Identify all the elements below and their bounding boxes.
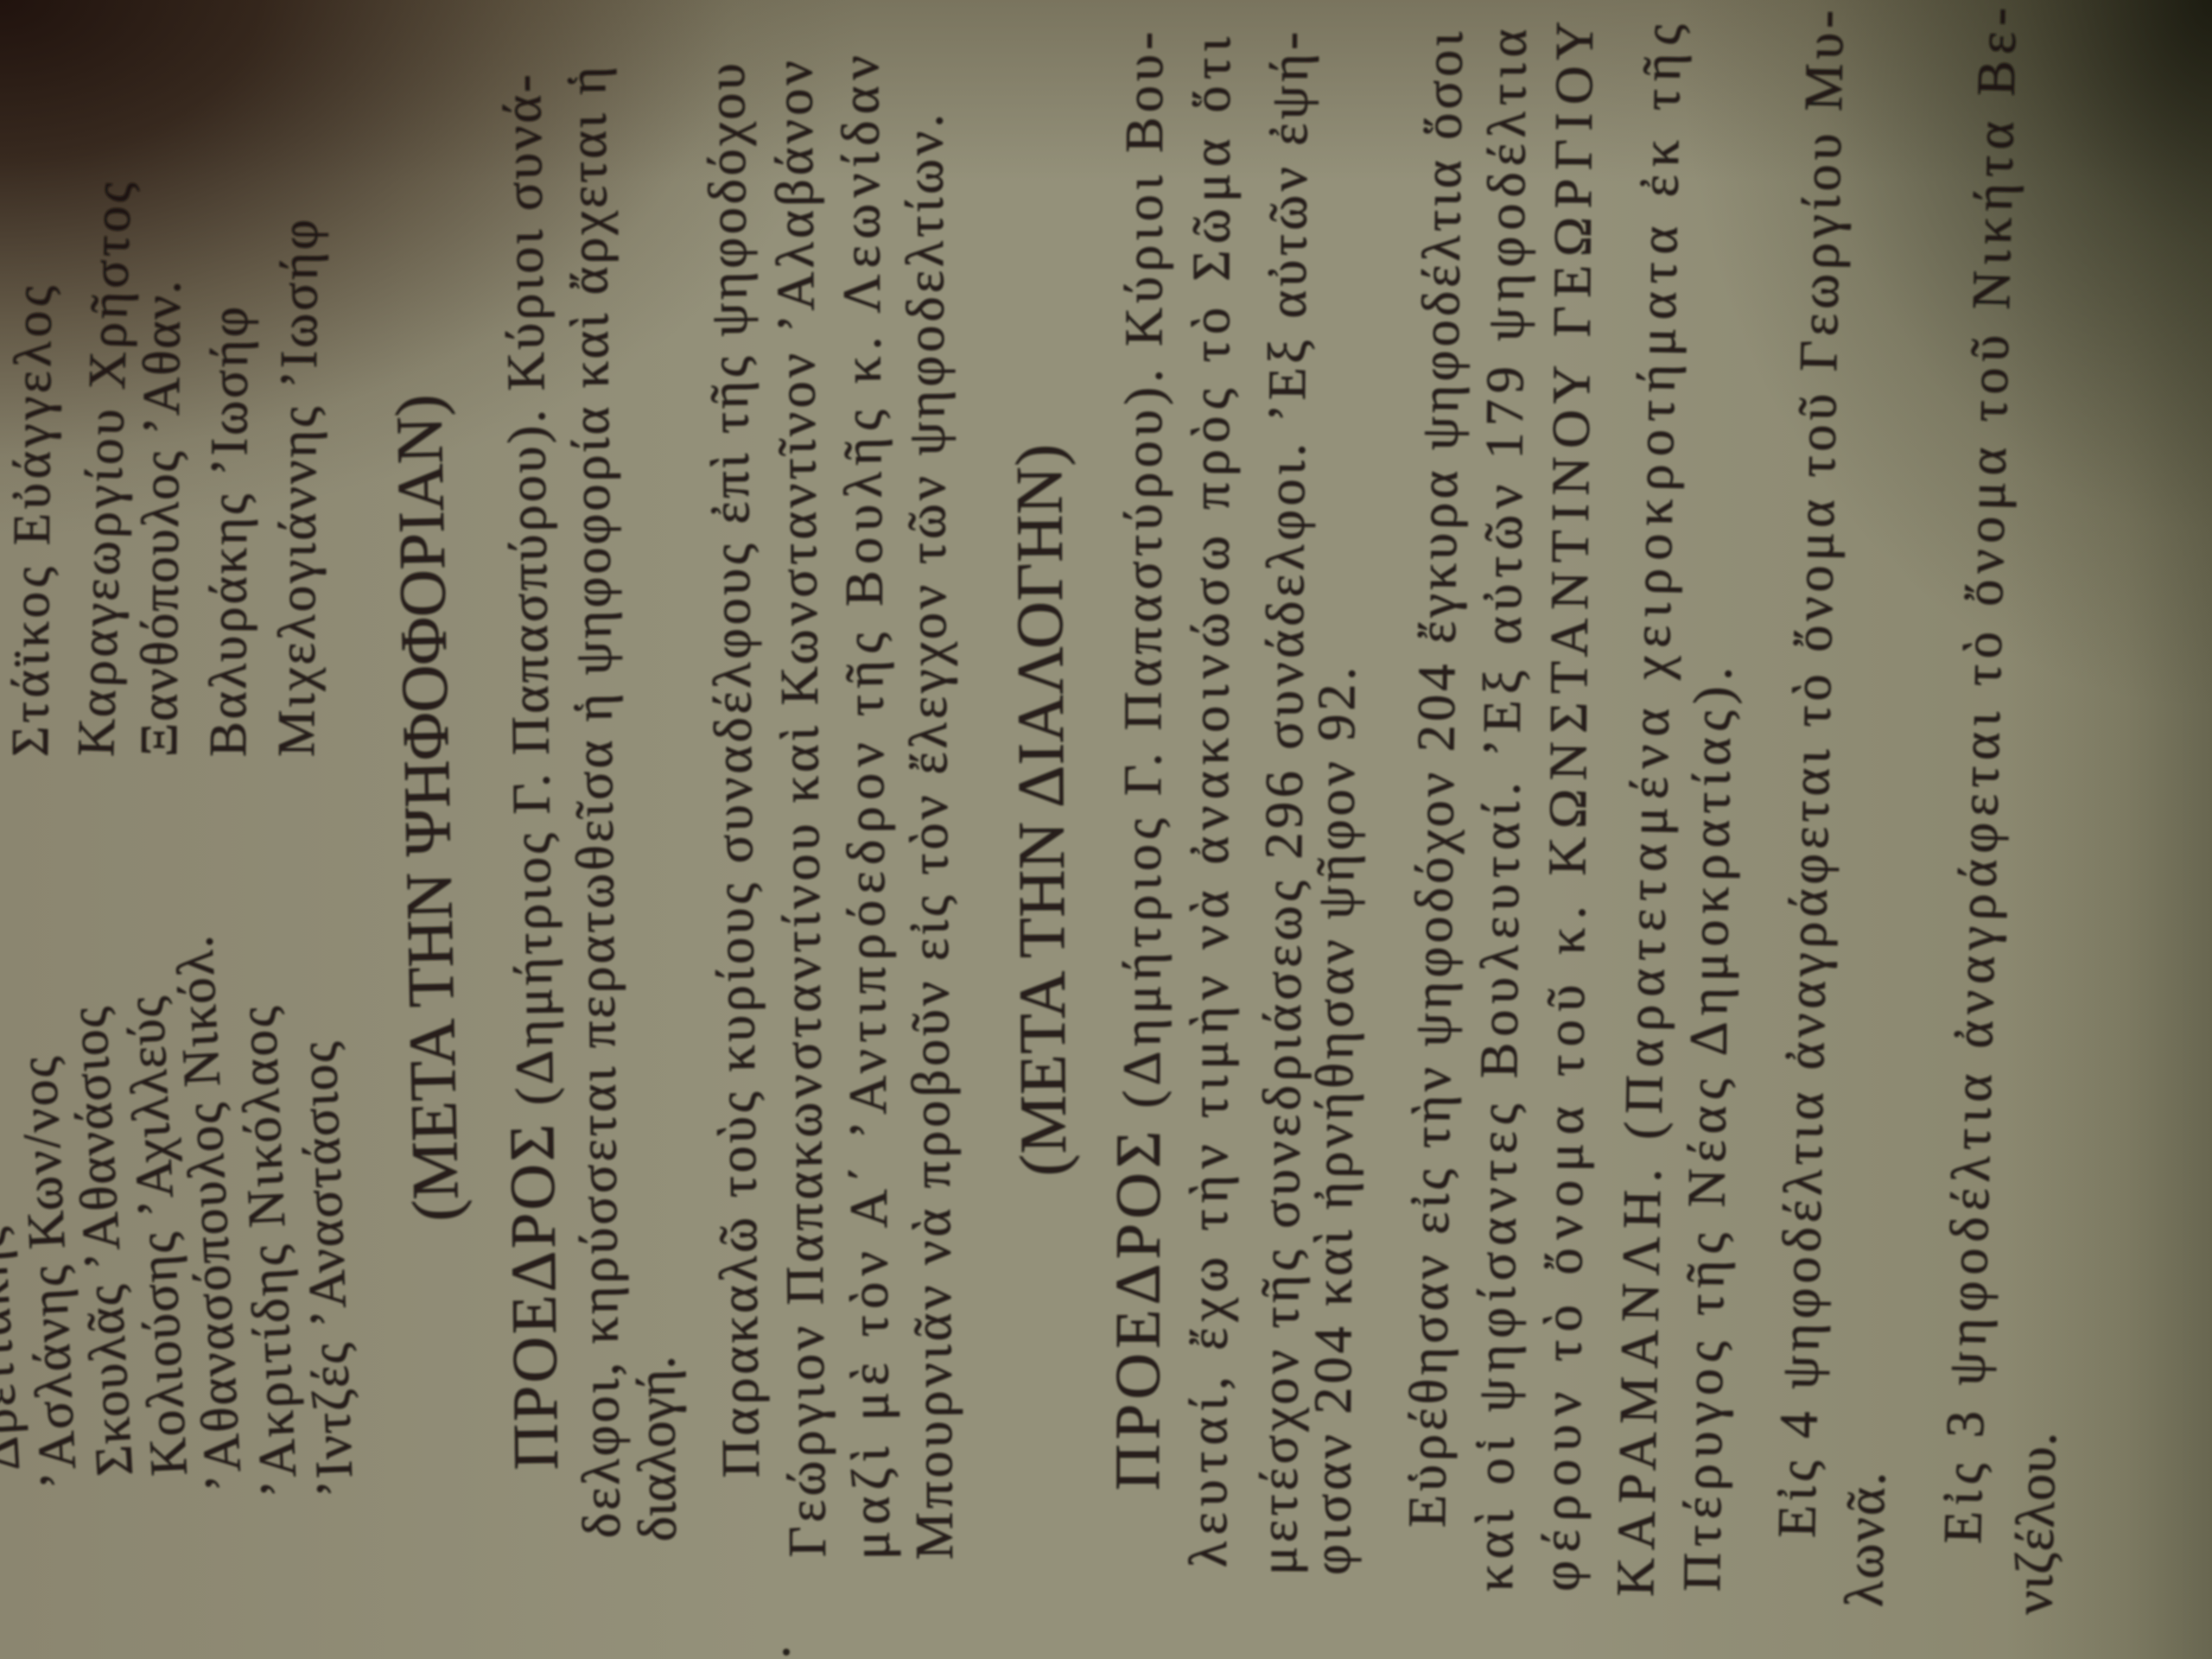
paragraph line: λευταί, ἔχω τὴν τιμὴν νὰ ἀνακοινώσω πρὸς τὸ Σῶμα ὅτι [1179, 37, 1242, 1567]
paragraph line: διαλογή. [627, 1356, 688, 1542]
paragraph line: λωνᾶ. [1835, 1471, 1897, 1607]
heading: after the count: (ΜΕΤΑ ΤΗΝ ΔΙΑΛΟΓΗΝ) [1003, 444, 1080, 1176]
name line: Ξανθόπουλος ’Αθαν. [130, 281, 192, 757]
text block: three ballots [1934, 7, 2068, 1615]
name line: Στάϊκος Εὐάγγελος [2, 286, 63, 757]
paragraph line: Μπουρνιᾶν νὰ προβοῦν εἰς τὸν ἔλεγχον τῶν ψηφοδελτίων. [895, 114, 964, 1560]
name line: ’Αθανασόπουλος Νικόλ. [166, 934, 253, 1493]
paragraph line: Γεώργιον Παπακωνσταντίνου καὶ Κωνσταντῖνον ’Αλαβάνον [765, 60, 837, 1557]
text block: president announces the count [484, 67, 688, 1542]
paragraph line: ΠΡΟΕΔΡΟΣ (Δημήτριος Γ. Παπαστύρου). Κύριοι Βου- [1103, 32, 1177, 1491]
name line: ’Ιντζές ’Αναστάσιος [289, 1041, 365, 1498]
paragraph line: νιζέλου. [2005, 1432, 2068, 1615]
heading: after the vote: (ΜΕΤΑ ΤΗΝ ΨΗΦΟΦΟΡΙΑΝ) [383, 394, 473, 1222]
paragraph line: Εἰς 4 ψηφοδέλτια ἀναγράφεται τὸ ὄνομα τοῦ Γεωργίου Μυ- [1768, 10, 1855, 1538]
name line: Σκουλᾶς ’Αθανάσιος [60, 1006, 144, 1478]
paragraph line: Πτέρυγος τῆς Νέας Δημοκρατίας). [1673, 666, 1743, 1592]
paragraph line: φέρουν τὸ ὄνομα τοῦ κ. ΚΩΝΣΤΑΝΤΙΝΟΥ ΓΕΩΡΓΙΟΥ [1532, 22, 1605, 1592]
name line: ’Ακριτίδης Νικόλαος [229, 1006, 308, 1498]
paragraph line: ΚΑΡΑΜΑΝΛΗ. (Παρατεταμένα χειροκροτήματα ἐκ τῆς [1606, 23, 1693, 1597]
text block: list of names, lower part [0, 934, 365, 1498]
name line: Μιχελογιάννης ’Ιωσήφ [268, 219, 329, 757]
text block: attendance figures [1103, 32, 1367, 1575]
name line: Κολιούσης ’Αχιλλεύς [117, 995, 199, 1478]
paragraph line: Παρακαλῶ τοὺς κυρίους συναδέλφους ἐπὶ τῆς ψηφοδόχου [697, 63, 771, 1478]
paragraph line: φισαν 204 καὶ ἠρνήθησαν ψῆφον 92. [1303, 667, 1367, 1575]
text block: list of names, upper part [2, 181, 329, 757]
paragraph line: καὶ οἱ ψηφίσαντες Βουλευταί. ’Εξ αὐτῶν 179 ψηφοδέλτια [1465, 29, 1538, 1592]
paragraph line: Εἰς 3 ψηφοδέλτια ἀναγράφεται τὸ ὄνομα τοῦ Νικήτα Βε- [1934, 7, 2028, 1544]
name line: Βαλυράκης ’Ιωσήφ [200, 307, 259, 757]
paragraph line: ΠΡΟΕΔΡΟΣ (Δημήτριος Γ. Παπασπύρου). Κύριοι συνά- [484, 74, 572, 1471]
ink speck [783, 1649, 790, 1656]
paragraph line: μετέσχον τῆς συνεδριάσεως 296 συνάδελφοι. ’Εξ αὐτῶν ἐψή- [1249, 32, 1319, 1575]
name line: ’Ασλάνης Κων/νος [10, 1056, 88, 1491]
name line: Καραγεωργίου Χρῆστος [67, 181, 143, 757]
paragraph line: Εὑρέθησαν εἰς τὴν ψηφοδόχον 204 ἔγκυρα ψηφοδέλτια ὅσοι [1398, 31, 1474, 1528]
paragraph line: μαζὶ μὲ τὸν Α΄ ’Αντιπρόεδρον τῆς Βουλῆς κ. Λεωνίδαν [831, 55, 901, 1560]
text block: tellers called [697, 55, 964, 1560]
paragraph line: δελφοι, κηρύσσεται περατωθεῖσα ἡ ψηφοφορία καὶ ἄρχεται ἡ [558, 67, 632, 1539]
text block: four ballots [1768, 10, 1897, 1607]
text block: result of the vote [1398, 22, 1743, 1597]
